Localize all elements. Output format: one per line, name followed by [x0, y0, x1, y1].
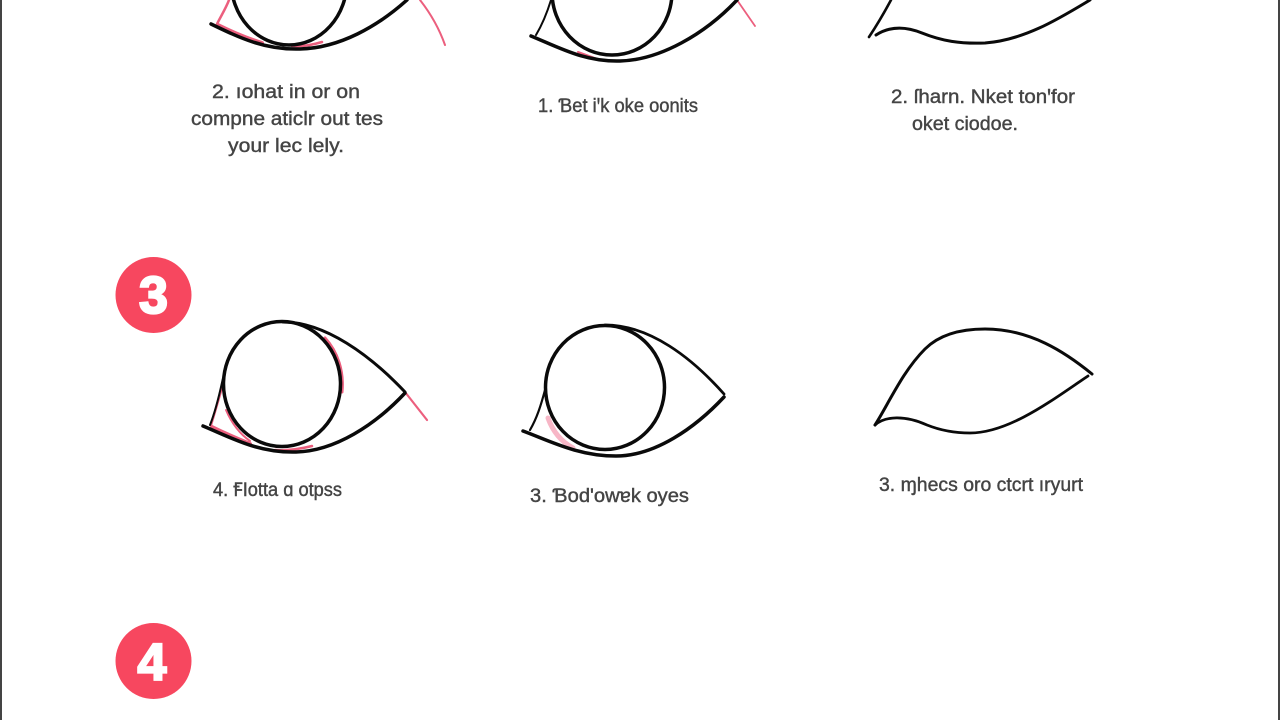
caption: top row, left: compne aticlr out tes [191, 109, 383, 130]
step badge 3 [116, 257, 192, 333]
step badge 3: 3 [139, 267, 168, 325]
caption: row 3, centre: 3. Ɓod'owɐk oyes [530, 486, 689, 507]
caption: top row, right: oket ciodoe. [912, 114, 1018, 135]
eye sketch: row 3, centre [523, 325, 724, 456]
caption: top row, left [191, 82, 383, 157]
eye sketch: row 3, left [203, 322, 427, 452]
eye sketch: top row, left [211, 0, 445, 49]
caption: top row, right: 2. ſharn. Nket tonꞌfor [891, 87, 1076, 108]
caption: row 3, right: 3. ɱhecs oro ctcrt ıryurt [879, 475, 1084, 496]
caption: top row, left: 2. ıohat in or on [212, 82, 360, 103]
step badge 4 [116, 623, 192, 699]
eye sketch: top row, centre [531, 0, 755, 61]
caption: top row, right [891, 87, 1076, 135]
eye sketch: row 3, right [875, 329, 1092, 433]
eye sketch: top row, right [869, 0, 1090, 43]
caption: row 3, left: 4. ꞘIotta ɑ otpss [213, 480, 342, 501]
step badge 4: 4 [138, 634, 167, 692]
caption: top row, centre: 1. Ɓet iꞌk oke oonits [538, 96, 698, 117]
caption: top row, left: your lec lely. [228, 136, 344, 157]
